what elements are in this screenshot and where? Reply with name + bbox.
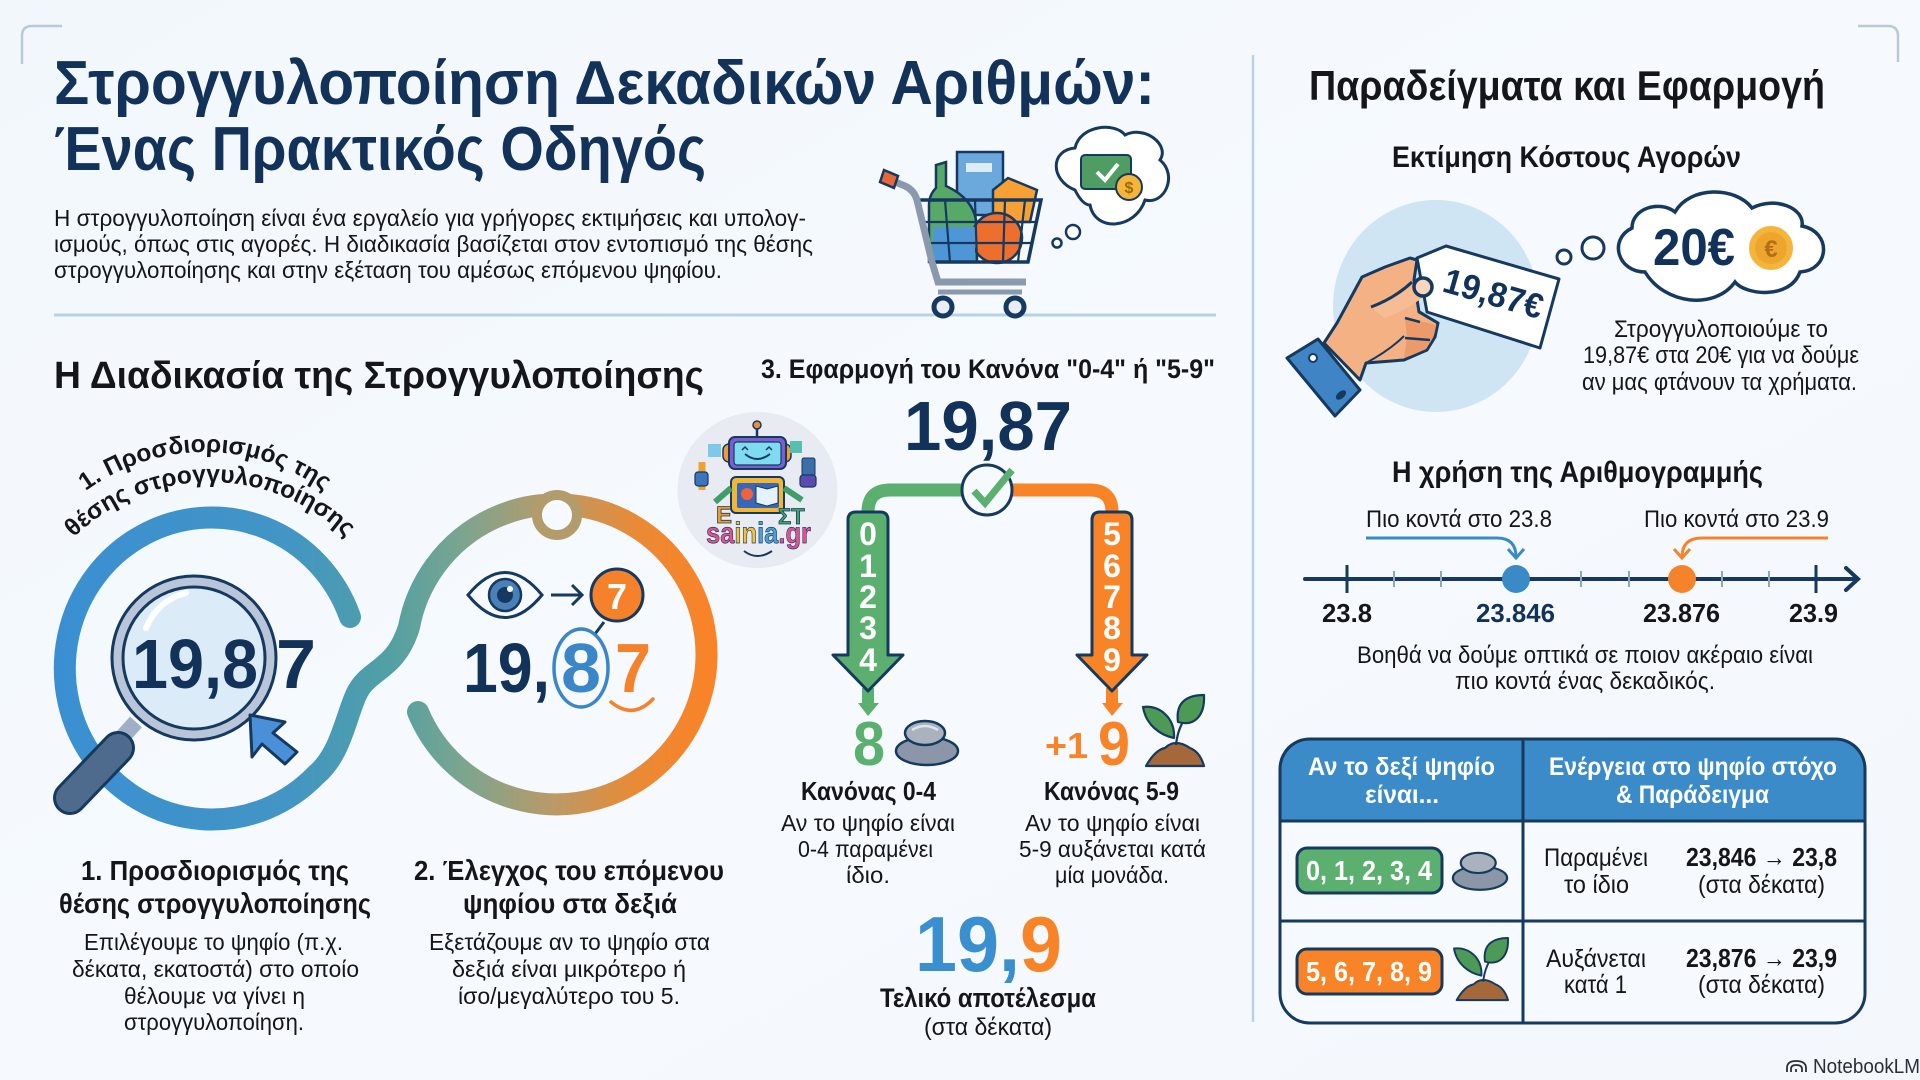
curved heading on ring: θέσης στρογγυλοποίησης: [64, 466, 354, 540]
ring knob: [537, 495, 577, 535]
green arrow 0-4: 2: [859, 579, 877, 615]
row: digits 0-4: [1297, 842, 1837, 899]
green arrow 0-4: 3: [859, 610, 877, 646]
rule 5-9: Αν το ψηφίο είναι: [1025, 810, 1200, 836]
rule table: [1280, 739, 1865, 1023]
heading: examples: Παραδείγματα και Εφαρμογή: [1309, 62, 1825, 109]
intro text: [54, 205, 813, 283]
row: digits 5-9: (στα δέκατα): [1698, 971, 1825, 999]
orange arrow 5-9: 7: [1103, 579, 1121, 615]
rule 0-4: Κανόνας 0-4: [801, 776, 936, 806]
table header: Ενέργεια στο ψηφίο στόχο: [1549, 753, 1837, 781]
icon: plant: [1143, 695, 1204, 766]
final result: Τελικό αποτέλεσμα: [880, 983, 1096, 1013]
title: [54, 49, 1155, 184]
table header: [1308, 753, 1837, 809]
number inside magnifier: 19,8: [132, 625, 258, 703]
final result: (στα δέκατα): [924, 1014, 1052, 1041]
step 1: Επιλέγουμε το ψηφίο (π.χ.: [84, 929, 343, 955]
intro text: Η στρογγυλοποίηση είναι ένα εργαλείο για γρήγορες εκτιμήσεις και υπολογ-: [54, 205, 806, 231]
icon: eye and arrow to 7: 7: [607, 576, 627, 617]
icon: shopping cart with thought cloud: [880, 127, 1169, 316]
orange arrow 5-9: 8: [1103, 610, 1121, 646]
step 1: θέλουμε να γίνει η: [124, 983, 305, 1009]
row: digits 0-4: Παραμένει: [1544, 844, 1648, 872]
rule 0-4: ίδιο.: [846, 862, 890, 888]
number line chart: [1305, 506, 1858, 628]
step 2: [414, 855, 724, 1009]
rule 0-4: [781, 776, 955, 888]
row: digits 5-9: κατά 1: [1564, 971, 1627, 999]
text: rounding explanation: [1582, 316, 1859, 396]
table header: & Παράδειγμα: [1616, 781, 1770, 809]
step 2: 2. Έλεγχος του επόμενου: [414, 855, 724, 886]
row: digits 0-4: 0, 1, 2, 3, 4: [1306, 855, 1432, 886]
curved heading on ring: 1. Προσδιορισμός της: [79, 436, 330, 494]
green arrow 0-4: 4: [859, 642, 877, 678]
subheading: number line: Η χρήση της Αριθμογραμμής: [1392, 456, 1763, 489]
step 2: ψηφίου στα δεξιά: [463, 888, 677, 919]
title: Ένας Πρακτικός Οδηγός: [54, 115, 706, 184]
text: number line note: Βοηθά να δούμε οπτικά σε ποιον ακέραιο είναι: [1357, 642, 1813, 669]
number with highlighted digit: 19,: [463, 629, 550, 707]
rule 5-9: 5-9 αυξάνεται κατά: [1019, 836, 1206, 862]
orange arrow 5-9: 6: [1103, 548, 1121, 584]
step 2: ίσο/μεγαλύτερο του 5.: [458, 983, 680, 1009]
step 1: στρογγυλοποίηση.: [124, 1009, 304, 1035]
rule 5-9: μία μονάδα.: [1055, 862, 1169, 888]
number inside magnifier: 7: [276, 625, 316, 703]
number line chart: 23.8: [1322, 598, 1372, 628]
result +1 9: +1: [1045, 725, 1088, 766]
intro text: ισμούς, όπως στις αγορές. Η διαδικασία βασίζεται στον εντοπισμό της θέσης: [54, 231, 813, 257]
orange arrow 5-9: 9: [1103, 642, 1121, 678]
table header: είναι...: [1365, 781, 1439, 809]
illustration: hand holding price tag: [1287, 200, 1559, 416]
number line chart: Πιο κοντά στο 23.9: [1644, 506, 1829, 533]
step 1: θέσης στρογγυλοποίησης: [59, 888, 371, 919]
logo: robot sainia.gr: Ε: [716, 502, 732, 529]
rule 5-9: Κανόνας 5-9: [1044, 776, 1179, 806]
thought cloud 20€: 20€: [1653, 219, 1735, 277]
row: digits 5-9: [1297, 938, 1837, 1000]
intro text: στρογγυλοποίησης και στην εξέταση του αμέσως επόμενου ψηφίου.: [54, 257, 722, 283]
result +1 9: [1045, 710, 1130, 779]
result +1 9: 9: [1098, 710, 1130, 779]
text: rounding explanation: 19,87€ στα 20€ για να δούμε: [1583, 342, 1859, 369]
text: number line note: πιο κοντά ένας δεκαδικός.: [1455, 668, 1715, 695]
icon: shopping cart with thought cloud: $: [1125, 180, 1134, 197]
number with highlighted digit: 7: [615, 629, 651, 707]
thought cloud 20€: €: [1764, 236, 1778, 263]
title: Στρογγυλοποίηση Δεκαδικών Αριθμών:: [54, 49, 1155, 118]
number with highlighted digit: 8: [561, 629, 601, 707]
number line chart: 23.876: [1643, 598, 1720, 628]
orange arrow 5-9: 5: [1103, 516, 1121, 552]
gradient ribbon rings: [65, 504, 706, 819]
orange arrow 5-9: [1077, 512, 1147, 716]
rule 0-4: 0-4 παραμένει: [798, 836, 933, 862]
heading: process: Η Διαδικασία της Στρογγυλοποίησης: [54, 355, 704, 397]
result 8: 8: [853, 710, 885, 779]
rule 0-4: Αν το ψηφίο είναι: [781, 810, 955, 836]
number line chart: Πιο κοντά στο 23.8: [1366, 506, 1552, 533]
step 2: Εξετάζουμε αν το ψηφίο στα: [429, 929, 710, 955]
step 1: δέκατα, εκατοστά) στο οποίο: [72, 956, 359, 982]
step 1: 1. Προσδιορισμός της: [81, 855, 349, 886]
heading: step 3: 3. Εφαρμογή του Κανόνα "0-4" ή "5-9": [761, 354, 1215, 384]
number line chart: 23.9: [1789, 598, 1838, 628]
logo: robot sainia.gr: ΣΤ: [778, 504, 805, 529]
number line chart: 23.846: [1476, 598, 1555, 628]
thought cloud 20€: [1557, 192, 1824, 300]
text: number line note: [1357, 642, 1813, 695]
final result: [880, 900, 1096, 1041]
text: rounding explanation: Στρογγυλοποιούμε το: [1614, 316, 1828, 343]
row: digits 5-9: 23,876 → 23,9: [1686, 943, 1837, 973]
logo: robot sainia.gr: [678, 412, 838, 568]
row: digits 0-4: το ίδιο: [1564, 871, 1629, 899]
row: digits 0-4: (στα δέκατα): [1698, 871, 1825, 899]
green arrow 0-4: 0: [859, 516, 877, 552]
text: rounding explanation: αν μας φτάνουν τα χρήματα.: [1582, 369, 1857, 396]
icon: cursor arrow: [250, 715, 297, 764]
row: digits 0-4: 23,846 → 23,8: [1686, 842, 1837, 872]
branch connectors: [868, 490, 1112, 512]
green arrow 0-4: 1: [859, 548, 877, 584]
row: digits 5-9: 5, 6, 7, 8, 9: [1306, 956, 1432, 987]
step 1: [59, 855, 371, 1035]
rule 5-9: [1019, 776, 1206, 888]
illustration: hand holding price tag: 19,87€: [1439, 261, 1548, 327]
row: digits 5-9: Αυξάνεται: [1546, 945, 1646, 973]
icon: stones: [896, 721, 958, 765]
icon: check circle: [962, 465, 1012, 515]
final result: 19,9: [915, 900, 1062, 988]
number 19,87: 19,87: [904, 387, 1072, 465]
step 2: δεξιά είναι μικρότερο ή: [452, 956, 686, 982]
table header: Αν το δεξί ψηφίο: [1308, 753, 1495, 781]
icon: eye and arrow to 7: [468, 569, 643, 634]
logo: robot sainia.gr: sainia.gr: [706, 517, 811, 550]
icon: magnifier: [70, 576, 276, 798]
green arrow 0-4: [833, 512, 903, 716]
subheading: shopping cost: Εκτίμηση Κόστους Αγορών: [1392, 141, 1741, 174]
number with highlighted digit: [463, 629, 653, 710]
